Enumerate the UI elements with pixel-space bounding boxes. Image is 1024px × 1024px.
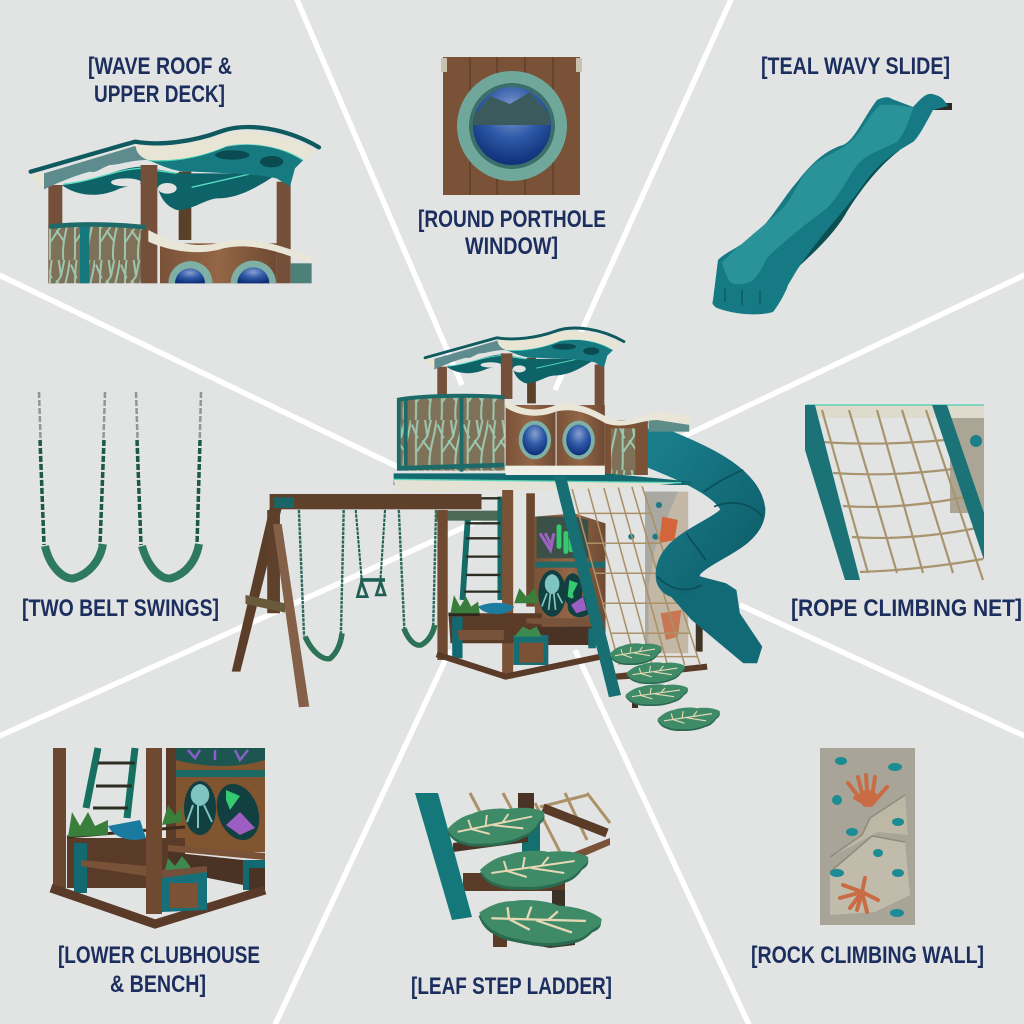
- a-frame legs: [232, 508, 309, 707]
- wood panel with porthole: [441, 57, 582, 195]
- roof detail drawing: [31, 127, 319, 283]
- panel: round porthole window: [418, 57, 606, 260]
- rock wall: [628, 492, 688, 653]
- panel: wave roof and upper deck: [31, 53, 319, 283]
- heading: clubhouse: & BENCH]: [110, 971, 206, 998]
- heading: slide: [TEAL WAVY SLIDE]: [761, 53, 950, 80]
- portholes: [519, 421, 595, 459]
- slide drawing: [712, 94, 952, 314]
- panel: two belt swings: [22, 392, 219, 622]
- panel: teal wavy slide: [712, 53, 952, 314]
- heading: wave roof: UPPER DECK]: [94, 81, 225, 108]
- heading: porthole: WINDOW]: [465, 233, 558, 260]
- beam bracket: [274, 497, 294, 508]
- lower posts: [437, 490, 703, 678]
- rope climbing net: [571, 485, 700, 665]
- heading: swings: [TWO BELT SWINGS]: [22, 595, 219, 622]
- panel: lower clubhouse and bench: [51, 748, 267, 998]
- swing pair drawing: [39, 392, 201, 578]
- swing 2: [399, 510, 436, 645]
- deck platform: [394, 466, 692, 492]
- panel: rock climbing wall: [751, 748, 984, 969]
- heading: porthole: [418, 206, 606, 260]
- floor frame: [437, 654, 707, 677]
- green cross beam: [436, 511, 506, 521]
- trapeze bar: [356, 510, 385, 597]
- slide chute: [671, 573, 762, 663]
- panel: leaf step ladder: [411, 793, 612, 1000]
- tube slide: [657, 448, 762, 590]
- central playset illustration: [232, 328, 762, 707]
- heading: clubhouse: [LOWER CLUBHOUSE: [58, 942, 260, 969]
- lower clubhouse back panel: [535, 513, 606, 640]
- benches and planters: [448, 588, 596, 665]
- clubhouse drawing: [51, 748, 267, 924]
- heading: clubhouse: [58, 942, 260, 998]
- swing 1: [299, 510, 344, 659]
- leaf step drawing: [415, 793, 610, 956]
- heading: wave roof: [88, 53, 232, 108]
- heading: leaf ladder: [LEAF STEP LADDER]: [411, 973, 612, 1000]
- swing frame beam: [270, 494, 481, 509]
- leaf steps of central playset: [610, 643, 720, 731]
- upper deck railing: [397, 396, 505, 472]
- net detail drawing: [805, 405, 984, 580]
- lower ladder: [463, 497, 500, 600]
- rock wall drawing: [820, 748, 915, 925]
- upper wall panels: [506, 405, 689, 475]
- panel: rope climbing net: [791, 405, 1022, 622]
- wavy cream trim: [506, 400, 690, 426]
- heading: porthole: [ROUND PORTHOLE: [418, 206, 606, 233]
- heading: wave roof: [WAVE ROOF &: [88, 53, 232, 80]
- teal diagonal beam: [554, 476, 621, 697]
- roof: [425, 328, 624, 408]
